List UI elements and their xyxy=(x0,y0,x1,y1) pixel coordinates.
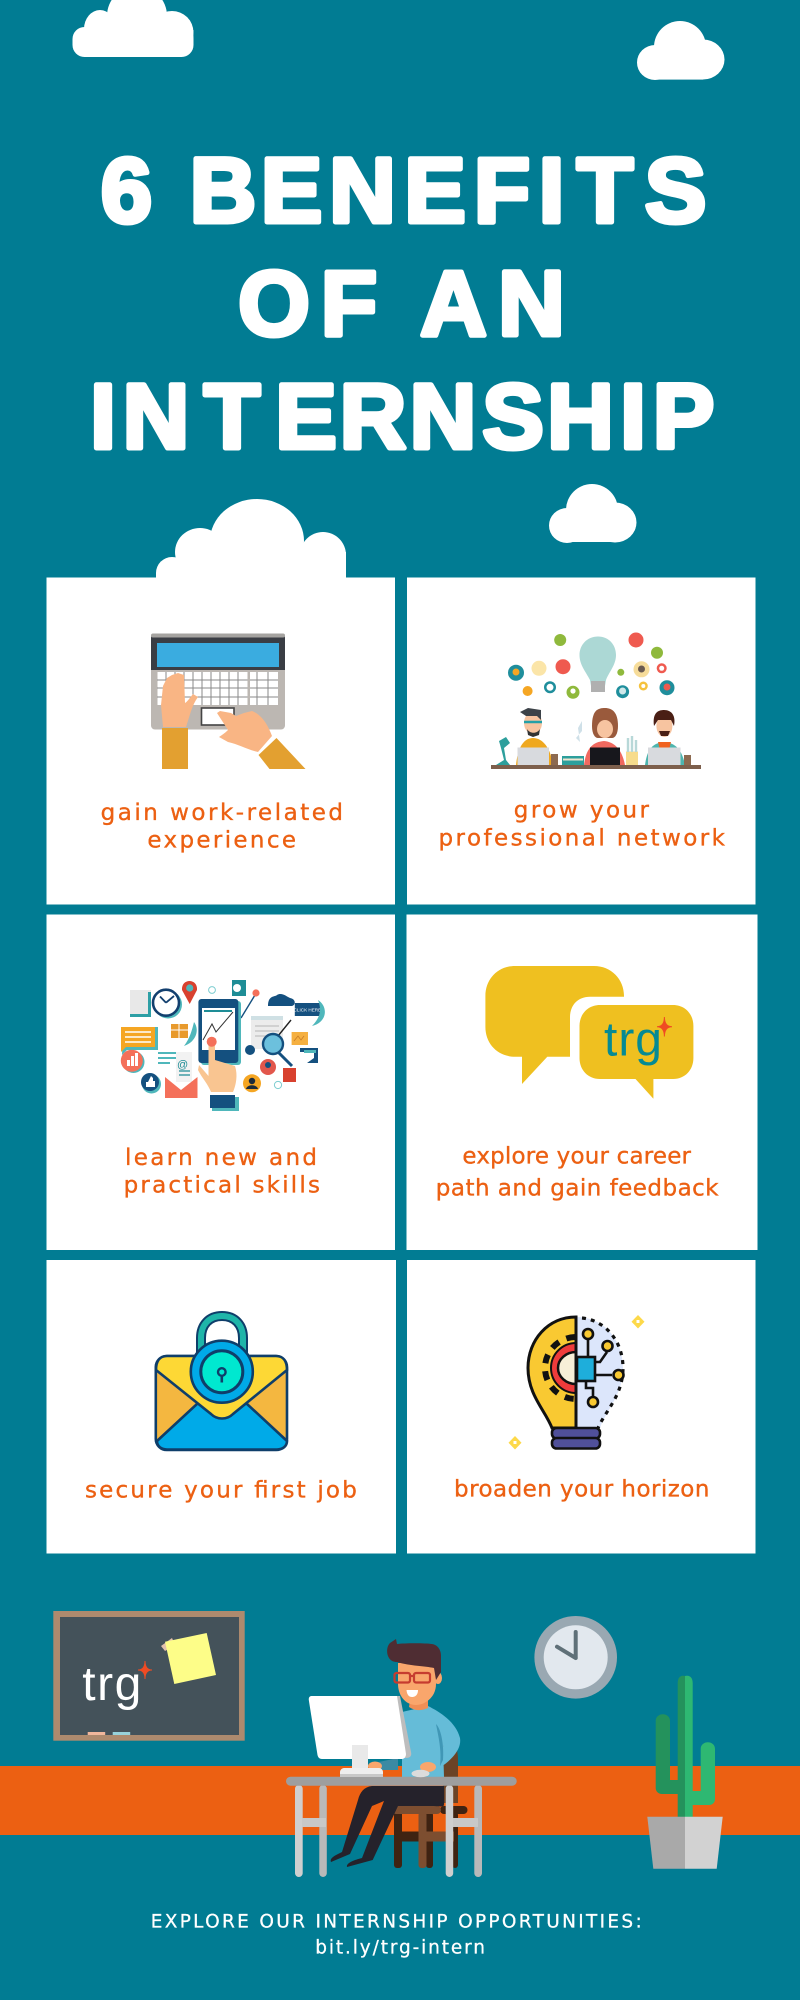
icon: digital skills cluster xyxy=(121,980,325,1111)
label xyxy=(438,798,726,852)
chair xyxy=(392,1728,468,1868)
panel: explore your career path xyxy=(406,914,758,1250)
cloud: above cards right xyxy=(549,484,636,543)
footer call to action: bit.ly/trg-intern xyxy=(315,1937,485,1958)
mouse xyxy=(412,1770,430,1777)
label: broaden your horizon xyxy=(454,1477,709,1503)
trousers xyxy=(331,1786,444,1867)
icon: digital skills cluster: CLICK HERE xyxy=(294,1008,321,1012)
label: path and gain feedback xyxy=(436,1176,719,1202)
label: grow your xyxy=(514,798,650,824)
label xyxy=(101,800,343,854)
panel: secure your first job xyxy=(46,1260,396,1554)
desk xyxy=(286,1777,517,1877)
cloud: large on first card xyxy=(156,499,346,589)
title: INTERNSHIP xyxy=(90,366,714,468)
monitor xyxy=(309,1696,411,1777)
label: learn new and xyxy=(125,1145,317,1171)
panel: grow your professional network xyxy=(407,578,756,904)
clock xyxy=(534,1616,617,1699)
icon: envelope with padlock xyxy=(156,1316,287,1450)
panel: gain work-related experience xyxy=(46,578,395,904)
label: secure your first job xyxy=(85,1478,357,1504)
icon: half gear half circuit light bulb xyxy=(508,1315,644,1450)
footer call to action xyxy=(151,1912,642,1958)
icon: speech bubbles with trg: trg xyxy=(604,1014,662,1067)
cloud: top right xyxy=(637,21,724,80)
icon: team with ideas xyxy=(491,632,701,769)
label xyxy=(124,1145,320,1199)
footer call to action: EXPLORE OUR INTERNSHIP OPPORTUNITIES: xyxy=(151,1912,642,1933)
label: gain work-related xyxy=(101,800,343,826)
orange floor band xyxy=(0,1766,800,1835)
icon: laptop with hands xyxy=(151,634,306,769)
sweater xyxy=(402,1706,460,1777)
head xyxy=(387,1639,442,1710)
chalkboard with trg logo: trg xyxy=(82,1658,141,1711)
icon: speech bubbles with trg xyxy=(485,966,693,1099)
label: practical skills xyxy=(124,1173,320,1199)
illustration: person at desk xyxy=(286,1639,517,1877)
panel: broaden your horizon xyxy=(407,1260,756,1554)
title: 6 BENEFITS xyxy=(101,140,706,242)
label xyxy=(436,1143,719,1202)
icon: digital skills cluster: @ xyxy=(177,1059,188,1071)
panel: learn new and practical skills xyxy=(46,914,395,1250)
title: OF AN xyxy=(238,253,565,355)
cactus in pot xyxy=(647,1676,723,1869)
label: experience xyxy=(147,828,296,854)
label: professional network xyxy=(438,826,726,852)
label: explore your career xyxy=(462,1143,692,1169)
title xyxy=(90,140,714,468)
chalkboard with trg logo xyxy=(53,1611,245,1741)
cloud: top left xyxy=(72,0,194,57)
